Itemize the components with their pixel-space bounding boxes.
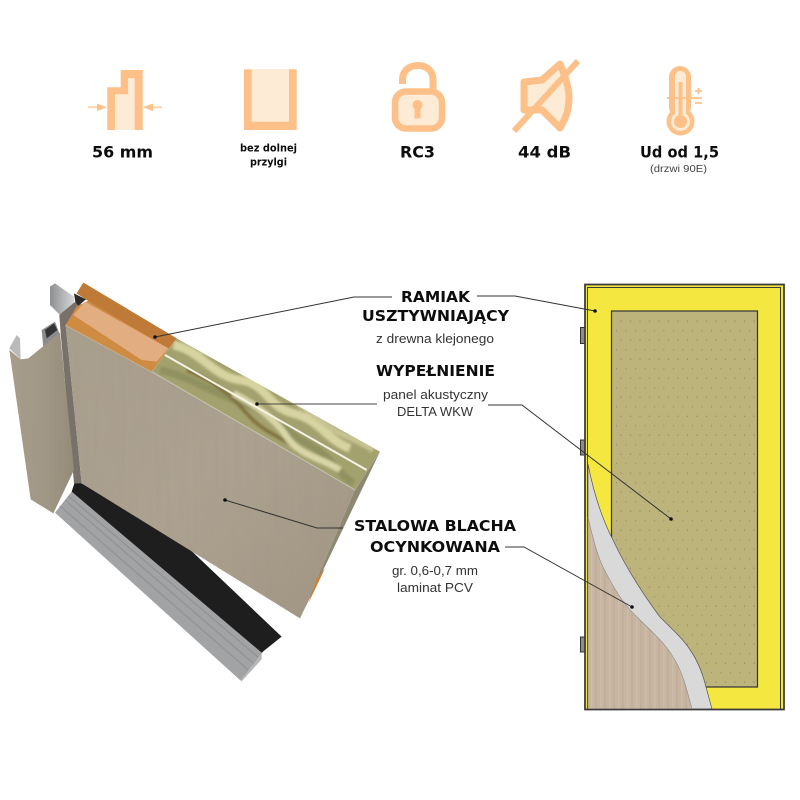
icon row (88, 61, 719, 175)
door section photo (9, 283, 380, 681)
icon: door profile 56 mm (88, 70, 162, 130)
yellow door frame (585, 284, 784, 710)
door top edge highlight (66, 325, 355, 490)
mineral wool (152, 338, 380, 490)
icon: thermometer (666, 66, 702, 136)
callout: stalowa blacha ocynkowana (354, 517, 516, 595)
callout: ramiak usztywniający: USZTYWNIAJĄCY (362, 307, 510, 325)
label: 44 dB: 44 dB (518, 143, 571, 162)
sill (55, 492, 263, 681)
door edge (300, 452, 380, 618)
callout: wypełnienie: panel akustyczny (383, 387, 489, 402)
callout: ramiak usztywniający: RAMIAK (401, 288, 471, 306)
laminate veneer (588, 517, 692, 709)
black seal (72, 478, 282, 653)
callout: wypełnienie (376, 362, 495, 419)
frame face (9, 333, 74, 513)
callout: ramiak usztywniający (362, 288, 510, 346)
icon: no bottom rebate (244, 69, 297, 130)
callout: ramiak usztywniający: z drewna klejonego (376, 331, 494, 346)
icon: muted speaker (514, 61, 578, 131)
callout: stalowa blacha ocynkowana: OCYNKOWANA (370, 538, 500, 556)
door leaf face (66, 325, 355, 618)
icon: open padlock (395, 66, 442, 128)
acoustic panel (612, 311, 758, 687)
door outer edge (585, 284, 784, 710)
callout: stalowa blacha ocynkowana: laminat PCV (397, 580, 473, 595)
door leaf grain (66, 325, 355, 618)
frame grain (9, 333, 74, 513)
panel dot pattern (612, 312, 757, 687)
silver frame return (9, 283, 85, 483)
callout: stalowa blacha ocynkowana: STALOWA BLACHA (354, 517, 516, 535)
callout leader lines (153, 296, 673, 609)
galvanised steel layer (588, 464, 712, 709)
label: RC3: RC3 (400, 143, 435, 162)
callout: stalowa blacha ocynkowana: gr. 0,6-0,7 mm (392, 563, 478, 578)
label: Ud od 1,5: Ud od 1,5 (640, 143, 719, 162)
label: bez dolnej przylgi (240, 143, 297, 169)
callout: wypełnienie: DELTA WKW (397, 404, 474, 419)
callout: wypełnienie: WYPEŁNIENIE (376, 362, 495, 380)
label: bez dolnej przylgi: bez dolnej (240, 143, 297, 155)
label: 56 mm: 56 mm (92, 143, 153, 162)
hinges (580, 328, 585, 652)
label: drzwi 90E: (drzwi 90E) (650, 163, 707, 175)
door inner outline (588, 288, 780, 710)
laminated timber frame (66, 283, 177, 372)
door diagram (580, 284, 784, 710)
label: bez dolnej przylgi: przylgi (250, 157, 287, 169)
